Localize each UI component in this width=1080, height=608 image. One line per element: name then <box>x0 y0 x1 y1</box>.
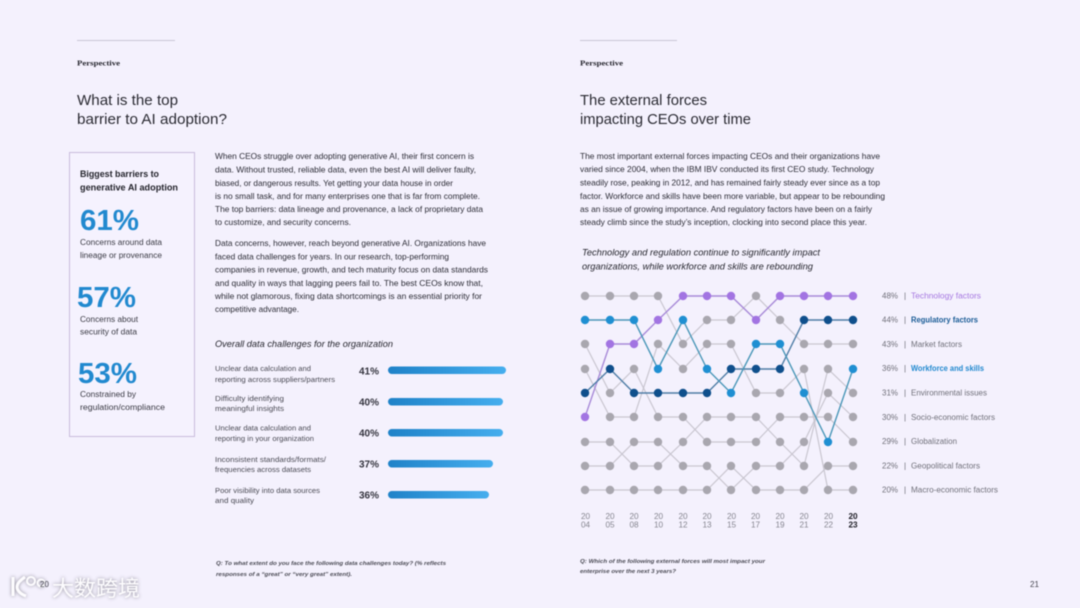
bar row 1: reporting across suppliers/partners <box>215 375 335 384</box>
year axis: 22 <box>824 520 833 530</box>
text block: right intro: factor. Workforce and skills have been more variable, but appear to be rebounding <box>580 191 885 201</box>
series labels: | <box>904 462 906 470</box>
text block: left intro: data. Without trusted, reliable data, even the best AI will deliver faulty, <box>215 164 476 174</box>
stat: 53% <box>78 358 166 412</box>
bar row 4: Inconsistent standards/formats/ <box>215 455 327 464</box>
chart heading: external forces: Technology and regulation continue to significantly impact <box>582 248 821 258</box>
series labels: 22% <box>882 462 898 470</box>
left page header: Perspective <box>77 58 121 68</box>
stat: 53%: 53% <box>78 358 137 390</box>
year axis: 04 <box>581 520 590 530</box>
bar row 5: and quality <box>215 496 254 505</box>
footnote: right <box>580 559 766 575</box>
series: technology factors <box>585 296 853 417</box>
panel: biggest barriers <box>70 152 194 436</box>
series labels: | <box>904 437 906 446</box>
chart heading: external forces: organizations, while workforce and skills are rebounding <box>582 262 813 272</box>
footnote: left: Q: To what extent do you face the following data challenges today? (% reflects <box>216 561 447 567</box>
series labels: Geopolitical factors <box>911 462 980 470</box>
series labels: 36% <box>882 364 898 373</box>
page number 21: 21 <box>1030 580 1039 589</box>
text block: left second paragraph: while not glamorous, fixing data shortcomings is an essential priority for <box>214 291 482 301</box>
text block: right intro: The most important external forces impacting CEOs and their organizations have <box>580 151 880 161</box>
stat: 61%: Concerns around data <box>80 238 163 247</box>
bar row 1: 41% <box>359 366 379 378</box>
bar row 3: reporting in your organization <box>215 434 314 443</box>
bar row 1 <box>215 364 506 384</box>
series labels: 43% <box>882 340 898 349</box>
series labels: | <box>904 316 906 324</box>
year axis: 20 <box>848 512 858 521</box>
bar chart: data challenges <box>215 364 506 505</box>
heading: top barrier <box>77 92 227 128</box>
bar row 4 <box>215 455 493 474</box>
text block: left intro: When CEOs struggle over adopting generative AI, their first concern is <box>215 151 474 161</box>
footnote: right: Q: Which of the following external forces will most impact your <box>580 559 766 565</box>
heading: top barrier: barrier to AI adoption? <box>77 111 227 128</box>
text block: right intro: steadily rose, peaking in 2012, and has remained fairly steady ever since as a top <box>580 178 880 188</box>
heading: external forces: The external forces <box>580 92 707 109</box>
year axis: 20 <box>751 512 760 521</box>
watermark icon <box>13 577 44 596</box>
series labels: Regulatory factors <box>911 316 979 324</box>
stat: 57%: 57% <box>77 282 136 314</box>
footnote: left: responses of a “great” or “very great” extent). <box>216 572 352 578</box>
series: market factors <box>585 296 853 344</box>
panel title: Biggest barriers to <box>80 169 159 179</box>
series: environmental path <box>585 369 853 466</box>
series: macro-economic path <box>585 344 853 490</box>
series labels: Environmental issues <box>911 388 987 398</box>
year axis: 20 <box>654 512 663 521</box>
right page header: Perspective <box>580 58 624 68</box>
chart heading: data challenges: Overall data challenges for the organization <box>215 339 393 349</box>
heading: top barrier: What is the top <box>77 92 178 109</box>
stat: 61% <box>80 205 163 260</box>
panel title <box>80 169 178 192</box>
year axis: 20 <box>581 512 590 521</box>
series labels: Technology factors <box>911 292 981 300</box>
text block: right intro: varied since 2004, when the IBM IBV conducted its first CEO study. Technology <box>580 164 875 174</box>
year axis <box>581 512 858 530</box>
year axis: 10 <box>654 520 663 530</box>
footnote: right: enterprise over the next 3 years? <box>580 569 676 575</box>
text block: left second paragraph: companies in revenue, growth, and tech maturity focus on data standards <box>215 264 488 274</box>
series labels: | <box>904 486 906 494</box>
series labels: 29% <box>882 437 898 446</box>
bar row 4: 37% <box>359 460 379 470</box>
text block: left second paragraph: faced data challenges for years. In our research, top-performing <box>215 252 449 262</box>
series labels: Market factors <box>911 340 962 349</box>
text block: right intro: steady climb since the study’s inception, clocking into second place this year. <box>580 217 867 227</box>
bar row 2: meaningful insights <box>215 404 284 413</box>
series: workforce and skills <box>585 320 853 442</box>
series: geopolitical path <box>585 466 853 490</box>
series labels: | <box>904 364 906 373</box>
page number 20: 20 <box>40 580 49 589</box>
text block: right intro <box>580 151 885 227</box>
year axis: 17 <box>751 520 760 530</box>
series: regulatory factors <box>585 320 853 393</box>
bar row 4: frequencies across datasets <box>215 465 311 474</box>
series labels: 30% <box>882 413 898 422</box>
series: socio path <box>585 393 853 490</box>
series labels: Globalization <box>911 437 957 446</box>
series labels: 20% <box>882 486 898 494</box>
series: socio-economic path <box>585 344 853 442</box>
watermark text: 大数跨境 <box>52 577 140 601</box>
bar row 5: 36% <box>359 490 379 502</box>
year axis: 08 <box>629 520 639 530</box>
footnote: left <box>216 561 447 578</box>
text block: left intro: to customize, and security concerns. <box>215 217 351 227</box>
year axis: 20 <box>605 512 615 521</box>
text block: left second paragraph: and quality in ways that lagging peers fail to. The best CEOs know that, <box>215 278 483 288</box>
stat: 57%: Concerns about <box>80 315 139 324</box>
stat: 61%: lineage or provenance <box>80 251 163 260</box>
stat: 53%: Constrained by <box>80 390 136 399</box>
series labels: 48% <box>882 292 898 300</box>
bar row 3: 40% <box>359 428 379 440</box>
year axis: 23 <box>848 520 858 530</box>
left page header <box>77 40 175 68</box>
stat: 53%: regulation/compliance <box>80 403 166 412</box>
text block: left intro <box>215 151 483 227</box>
year axis: 20 <box>727 512 736 521</box>
series labels: | <box>904 292 906 300</box>
stat: 61%: 61% <box>80 205 139 237</box>
bar row 3 <box>215 424 503 443</box>
year axis: 20 <box>799 512 809 521</box>
bar row 2: 40% <box>359 398 379 408</box>
text block: left intro: is no small task, and for many enterprises one that is far from complete. <box>215 191 480 201</box>
bar row 5: Poor visibility into data sources <box>215 486 320 495</box>
series labels: | <box>904 413 906 422</box>
series labels: Macro-economic factors <box>911 486 998 494</box>
series labels: Socio-economic factors <box>911 413 995 422</box>
series labels: Workforce and skills <box>911 364 985 373</box>
heading: external forces: impacting CEOs over time <box>580 111 751 128</box>
series labels: | <box>904 388 906 398</box>
series labels: 44% <box>882 316 898 324</box>
bar row 2: Difficulty identifying <box>215 394 284 403</box>
year axis: 15 <box>727 520 736 530</box>
year axis: 20 <box>629 512 639 521</box>
stat: 57% <box>77 282 139 336</box>
text block: left second paragraph <box>214 238 488 314</box>
chart heading: external forces <box>582 248 821 272</box>
year axis: 20 <box>702 512 712 521</box>
text block: left second paragraph: competitive advantage. <box>215 304 299 314</box>
year axis: 20 <box>824 512 833 521</box>
stat: 57%: security of data <box>80 328 138 336</box>
year axis: 20 <box>678 512 688 521</box>
bar row 2 <box>215 394 503 413</box>
text block: right intro: as an issue of growing importance. And regulatory factors have been on a fairly <box>580 204 873 214</box>
panel title: generative AI adoption <box>80 182 178 192</box>
bump chart: external forces 2004 to 2023 <box>581 292 998 530</box>
year axis: 19 <box>775 520 785 530</box>
heading: external forces <box>580 92 751 128</box>
watermark <box>13 577 140 601</box>
year axis: 21 <box>799 520 809 530</box>
bar row 3: Unclear data calculation and <box>215 424 311 432</box>
series labels <box>882 292 998 494</box>
year axis: 20 <box>775 512 785 521</box>
bar row 5 <box>215 486 489 505</box>
text block: left second paragraph: Data concerns, however, reach beyond generative AI. Organizations have <box>215 238 486 248</box>
text block: left intro: The top barriers: data lineage and provenance, a lack of proprietary data <box>215 204 483 214</box>
bar row 1: Unclear data calculation and <box>215 364 311 373</box>
year axis: 12 <box>678 520 688 530</box>
year axis: 05 <box>605 520 615 530</box>
year axis: 13 <box>702 520 712 530</box>
right page header <box>580 40 677 68</box>
series labels: 31% <box>882 388 898 398</box>
series labels: | <box>904 340 906 349</box>
text block: left intro: biased, or dangerous results. Yet getting your data house in order <box>215 178 453 188</box>
